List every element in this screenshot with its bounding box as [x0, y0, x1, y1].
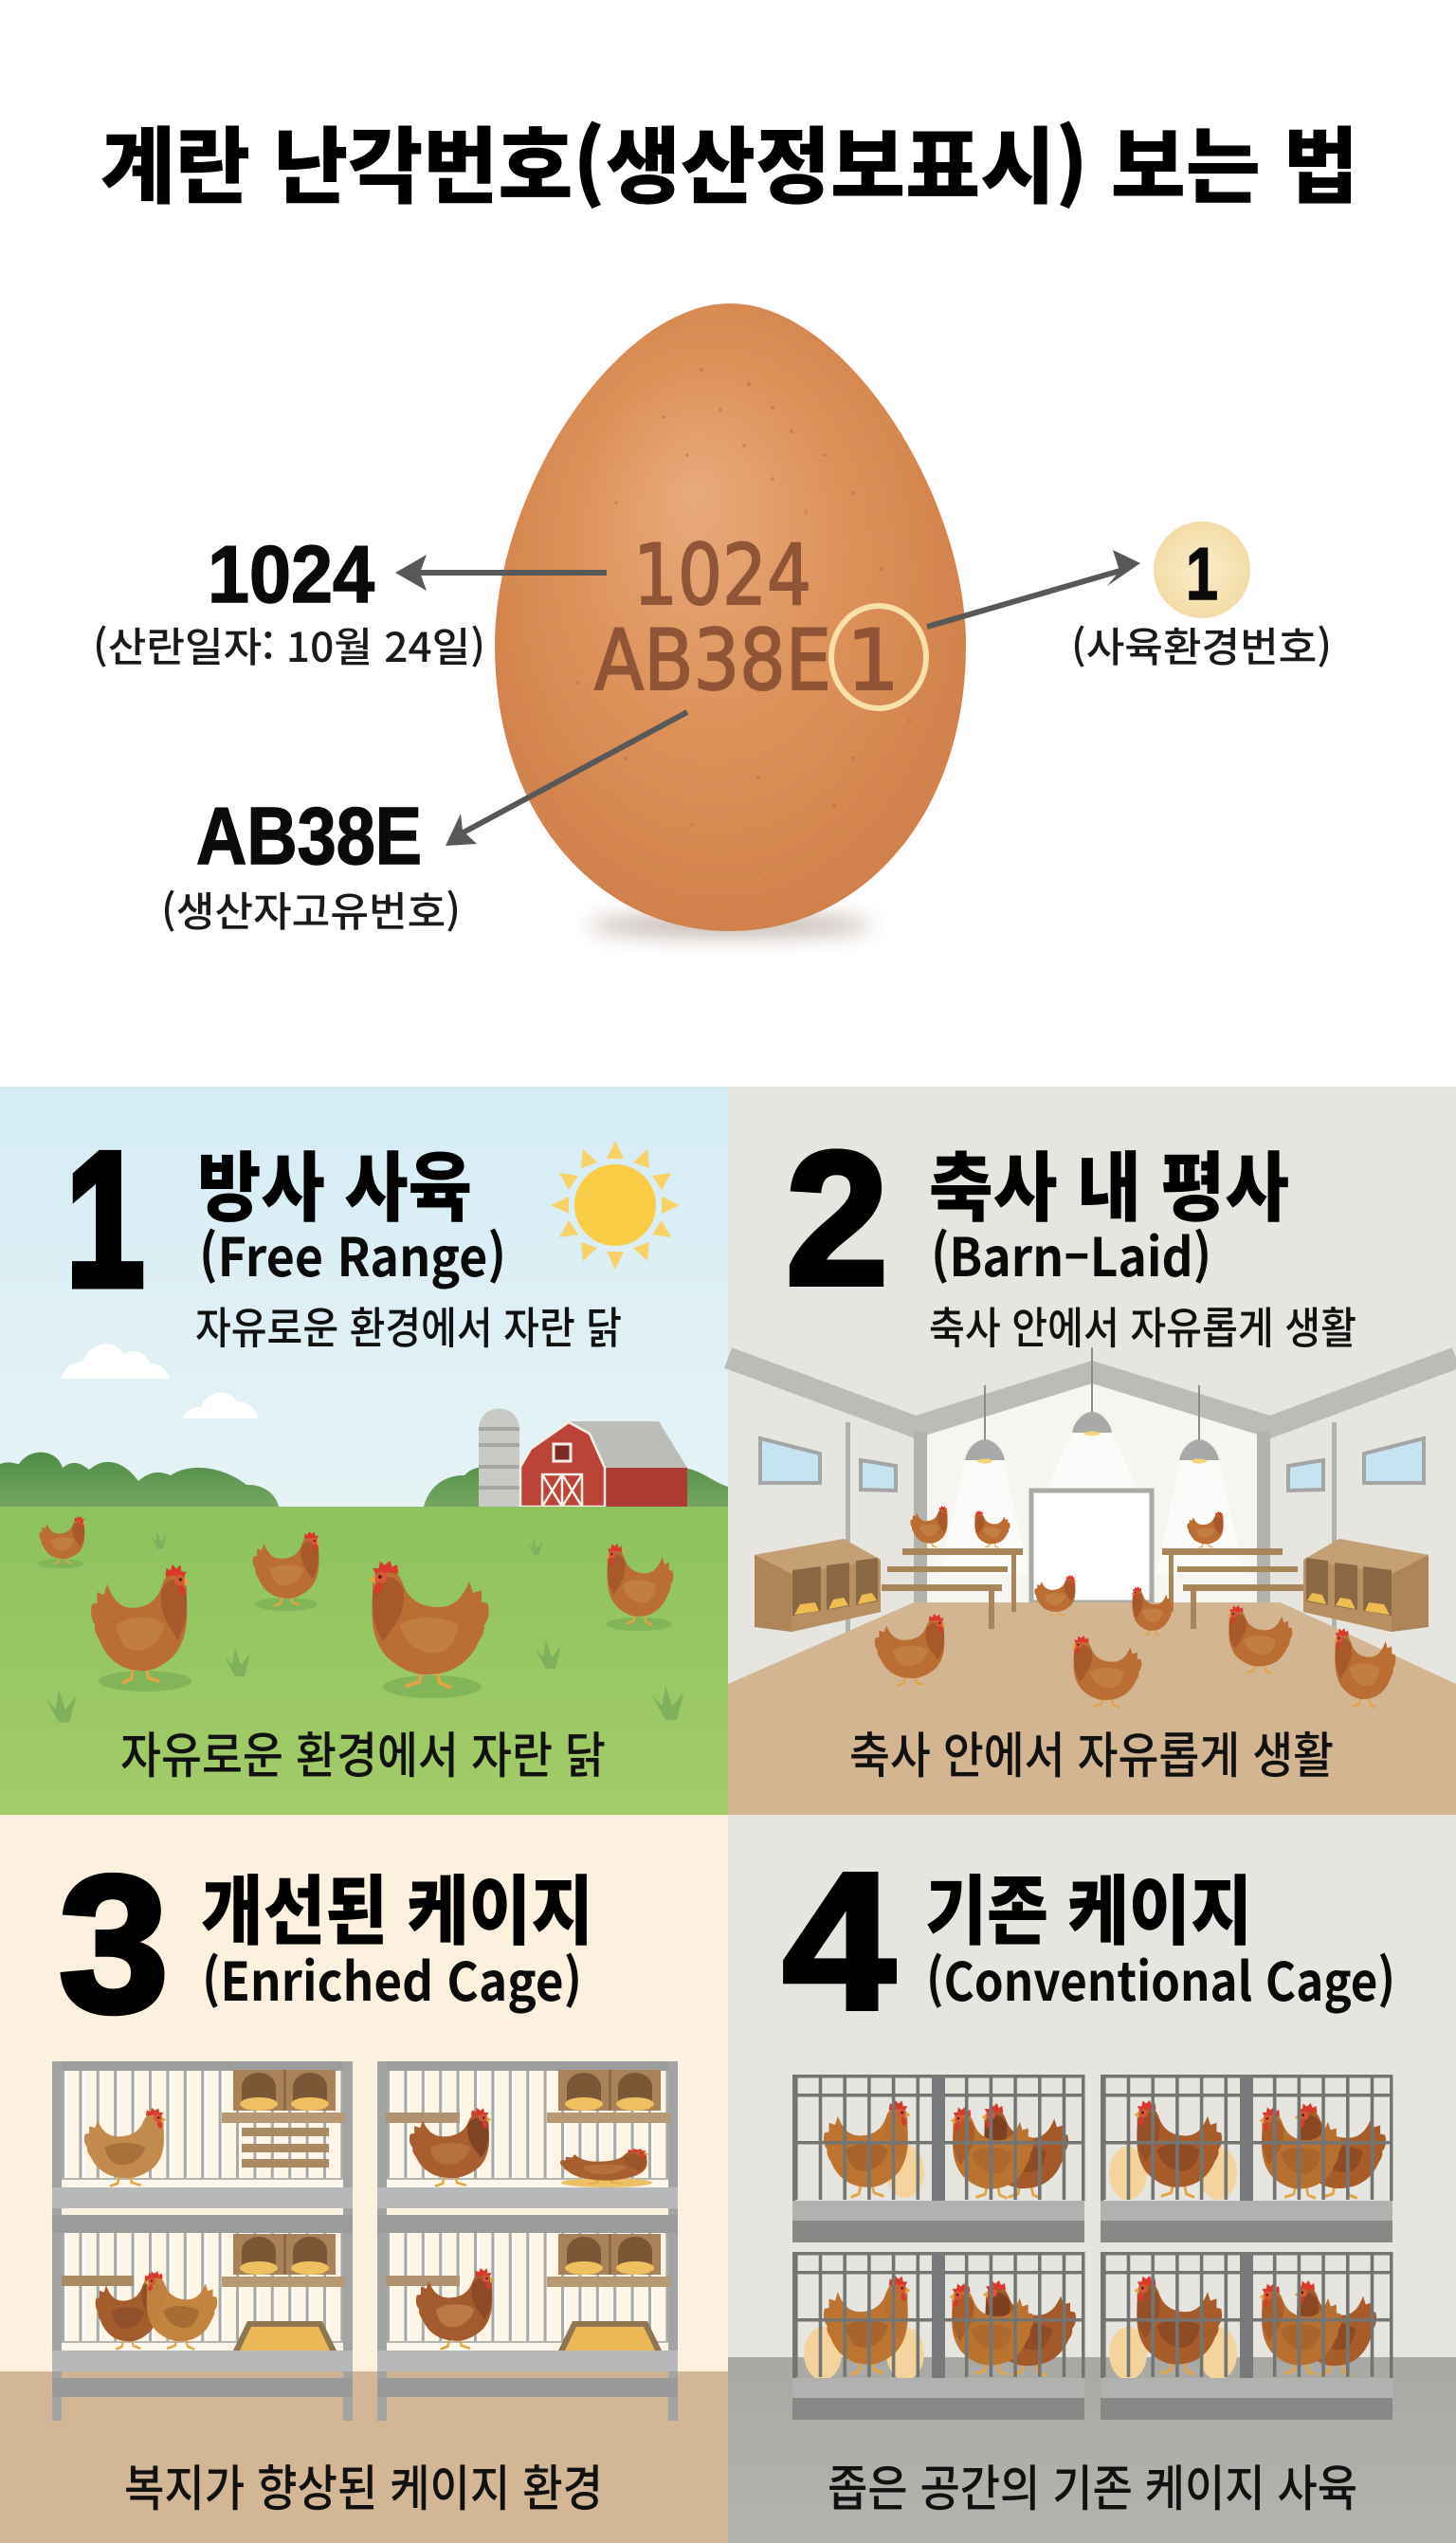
title: 계란 난각번호(생산정보표시) 보는 법	[100, 101, 1358, 221]
arrow: housing number	[927, 550, 1140, 627]
arrow: date	[395, 555, 607, 591]
cage bottom left	[792, 2252, 1084, 2420]
description: 축사 안에서 자유롭게 생활	[929, 1294, 1356, 1357]
barn	[520, 1421, 687, 1507]
perches	[62, 2128, 329, 2286]
label: date: (산란일자: 10월 24일)	[93, 615, 485, 674]
floor	[728, 2357, 1456, 2543]
caption: 축사 안에서 자유롭게 생활	[849, 1716, 1334, 1787]
panel: free range	[0, 1087, 728, 1815]
icon: number badge	[1154, 521, 1250, 618]
number 2: 2	[786, 1113, 888, 1325]
silo	[479, 1409, 519, 1507]
perches	[882, 1548, 1303, 1629]
cloud	[62, 1345, 170, 1379]
subtitle english: (Enriched Cage)	[202, 1940, 582, 2017]
panel: barn-laid	[728, 1087, 1456, 1815]
egg printed code 1024: 1024	[633, 526, 811, 624]
chickens	[84, 2108, 167, 2186]
perches	[386, 2113, 460, 2286]
chickens	[410, 2108, 492, 2186]
cage top right	[1101, 2075, 1393, 2242]
description: 자유로운 환경에서 자란 닭	[195, 1294, 622, 1357]
egg diagram	[495, 303, 966, 937]
windows	[760, 1438, 1424, 1491]
number 4: 4	[783, 1833, 895, 2050]
cage top left	[792, 2075, 1084, 2242]
label: date	[93, 530, 485, 674]
caption: 복지가 향상된 케이지 환경	[124, 2449, 603, 2520]
nests	[222, 2070, 345, 2123]
label: housing number: 1	[1186, 532, 1218, 615]
egg printed code 1: 1	[846, 612, 900, 709]
heading: 축사 내 평사	[929, 1127, 1289, 1237]
grass tufts and shadows	[38, 1531, 683, 1722]
caption: 좁은 공간의 기존 케이지 사육	[828, 2449, 1357, 2520]
highlight ring	[831, 606, 926, 708]
posts	[846, 1422, 1337, 1650]
cage unit right	[377, 2061, 678, 2421]
feed tray	[558, 2321, 662, 2351]
wall	[0, 1815, 728, 2372]
icon: sun	[551, 1141, 680, 1270]
chickens: free range	[40, 1516, 673, 1687]
label: housing number: (사육환경번호)	[1071, 615, 1332, 674]
nest box right	[1303, 1539, 1429, 1632]
heading: 개선된 케이지	[201, 1851, 593, 1961]
label: producer: (생산자고유번호)	[161, 880, 461, 939]
door	[1031, 1491, 1152, 1602]
cage bottom right	[1101, 2252, 1393, 2420]
light cones	[940, 1433, 1244, 1574]
panel: enriched cage	[0, 1815, 728, 2543]
back wall	[914, 1376, 1270, 1602]
lamps	[965, 1347, 1219, 1464]
number 3: 3	[59, 1836, 169, 2053]
label: housing number	[1071, 521, 1332, 674]
wall	[728, 1815, 1456, 2357]
grass field	[0, 1507, 728, 1815]
arrow: producer	[446, 712, 687, 846]
label: producer: AB38E	[196, 792, 422, 882]
panel: conventional cage	[728, 1815, 1456, 2543]
label: date: 1024	[208, 530, 374, 620]
floor	[728, 1602, 1456, 1815]
heading: 기존 케이지	[925, 1851, 1252, 1961]
nests	[547, 2070, 670, 2123]
subtitle english: (Free Range)	[199, 1216, 506, 1292]
sky	[0, 1087, 728, 1507]
cloud	[183, 1393, 258, 1418]
wall background	[728, 1087, 1456, 1815]
heading: 방사 사육	[197, 1127, 472, 1237]
nest box left	[755, 1539, 881, 1632]
label: producer	[161, 792, 461, 939]
egg printed code AB38E: AB38E	[594, 612, 831, 709]
subtitle english: (Barn–Laid)	[931, 1216, 1211, 1292]
floor	[0, 2371, 728, 2543]
feed tray	[233, 2321, 337, 2351]
number 1: 1	[66, 1114, 144, 1326]
subtitle english: (Conventional Cage)	[926, 1940, 1395, 2017]
egg shadow	[588, 914, 872, 937]
caption: 자유로운 환경에서 자란 닭	[120, 1716, 606, 1787]
egg	[495, 303, 966, 931]
trees	[0, 1453, 728, 1507]
chickens: barn	[875, 1506, 1395, 1707]
roof beams	[728, 1358, 1456, 1427]
cage unit left	[52, 2061, 353, 2421]
